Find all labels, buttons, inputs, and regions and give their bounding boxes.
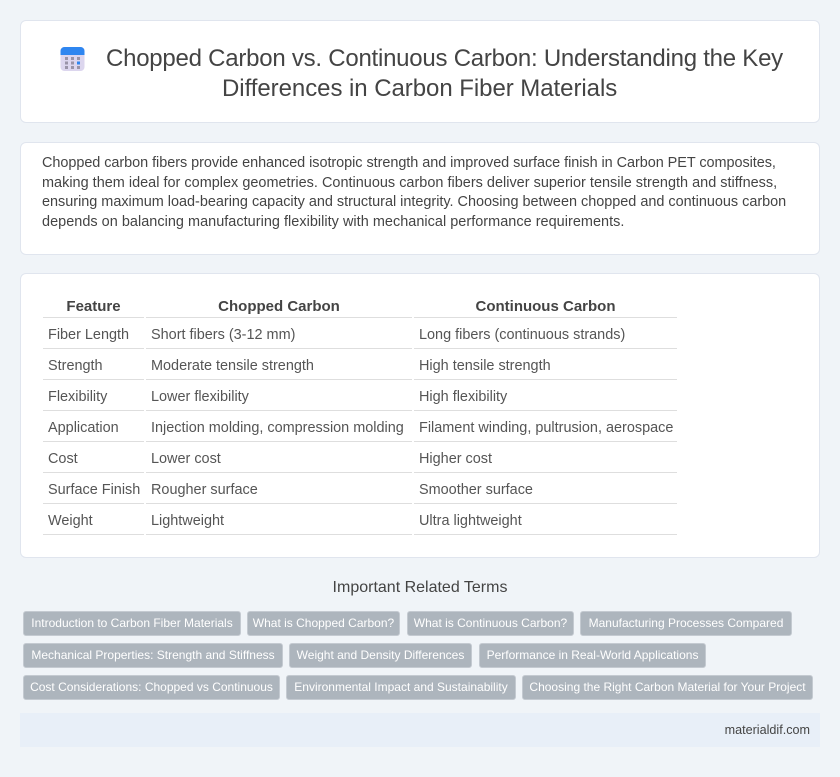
header panel	[20, 20, 820, 123]
comparison table: Cost	[48, 451, 78, 467]
related term tags	[23, 611, 813, 700]
comparison table: Application	[48, 420, 119, 436]
comparison table: Moderate tensile strength	[151, 358, 314, 374]
comparison table: Strength	[48, 358, 103, 374]
related term tags: What is Chopped Carbon?	[253, 616, 394, 630]
intro text: ensuring maximum load-bearing capacity and structural integrity. Choosing between chopped and continuous carbon	[42, 194, 786, 210]
comparison table: Injection molding, compression molding	[151, 420, 404, 436]
panel: introduction	[20, 142, 820, 255]
comparison table: Chopped Carbon	[218, 298, 340, 315]
related term tags: Environmental Impact and Sustainability	[294, 680, 508, 694]
icon: calendar grid	[60, 47, 84, 71]
related term tags: Introduction to Carbon Fiber Materials	[31, 616, 233, 630]
intro text: depends on balancing manufacturing flexibility with mechanical performance requirements.	[42, 214, 624, 230]
comparison table: Lightweight	[151, 513, 224, 529]
comparison table: Higher cost	[419, 451, 492, 467]
related term tags: Weight and Density Differences	[297, 648, 464, 662]
related term tags: Performance in Real-World Applications	[487, 648, 698, 662]
comparison table: Flexibility	[48, 389, 107, 405]
comparison table: High flexibility	[419, 389, 507, 405]
related term tags: What is Continuous Carbon?	[414, 616, 567, 630]
comparison table: Filament winding, pultrusion, aerospace	[419, 420, 673, 436]
related term tags: Choosing the Right Carbon Material for Your Project	[529, 680, 806, 694]
comparison table: Smoother surface	[419, 482, 533, 498]
intro text: Chopped carbon fibers provide enhanced isotropic strength and improved surface finish in Carbon PET composites,	[42, 155, 776, 171]
comparison table: Weight	[48, 513, 93, 529]
comparison table: Fiber Length	[48, 327, 129, 343]
comparison table: Lower flexibility	[151, 389, 249, 405]
comparison table: Feature	[66, 298, 121, 315]
title	[106, 45, 783, 102]
title: Differences in Carbon Fiber Materials	[222, 74, 617, 102]
footer source: materialdif.com	[725, 723, 810, 737]
comparison table	[43, 298, 677, 535]
title: Chopped Carbon vs. Continuous Carbon: Understanding the Key	[106, 45, 783, 72]
comparison table: Long fibers (continuous strands)	[419, 327, 625, 343]
related term tags: Cost Considerations: Chopped vs Continuous	[30, 680, 273, 694]
comparison table: Continuous Carbon	[476, 298, 615, 315]
related terms heading: Important Related Terms	[333, 579, 507, 596]
comparison table: Rougher surface	[151, 482, 258, 498]
related term tags: Mechanical Properties: Strength and Stiffness	[31, 648, 275, 662]
comparison table: Surface Finish	[48, 482, 140, 498]
comparison table: Ultra lightweight	[419, 513, 522, 529]
intro text: making them ideal for complex geometries. Continuous carbon fibers deliver superior tensile strength and stiffness,	[42, 174, 777, 190]
footer bar	[20, 713, 820, 747]
related term tags: Manufacturing Processes Compared	[589, 616, 783, 630]
intro text	[42, 155, 786, 230]
comparison table: High tensile strength	[419, 358, 551, 374]
comparison table: Short fibers (3-12 mm)	[151, 327, 295, 343]
panel: comparison table	[20, 273, 820, 558]
comparison table: Lower cost	[151, 451, 221, 467]
